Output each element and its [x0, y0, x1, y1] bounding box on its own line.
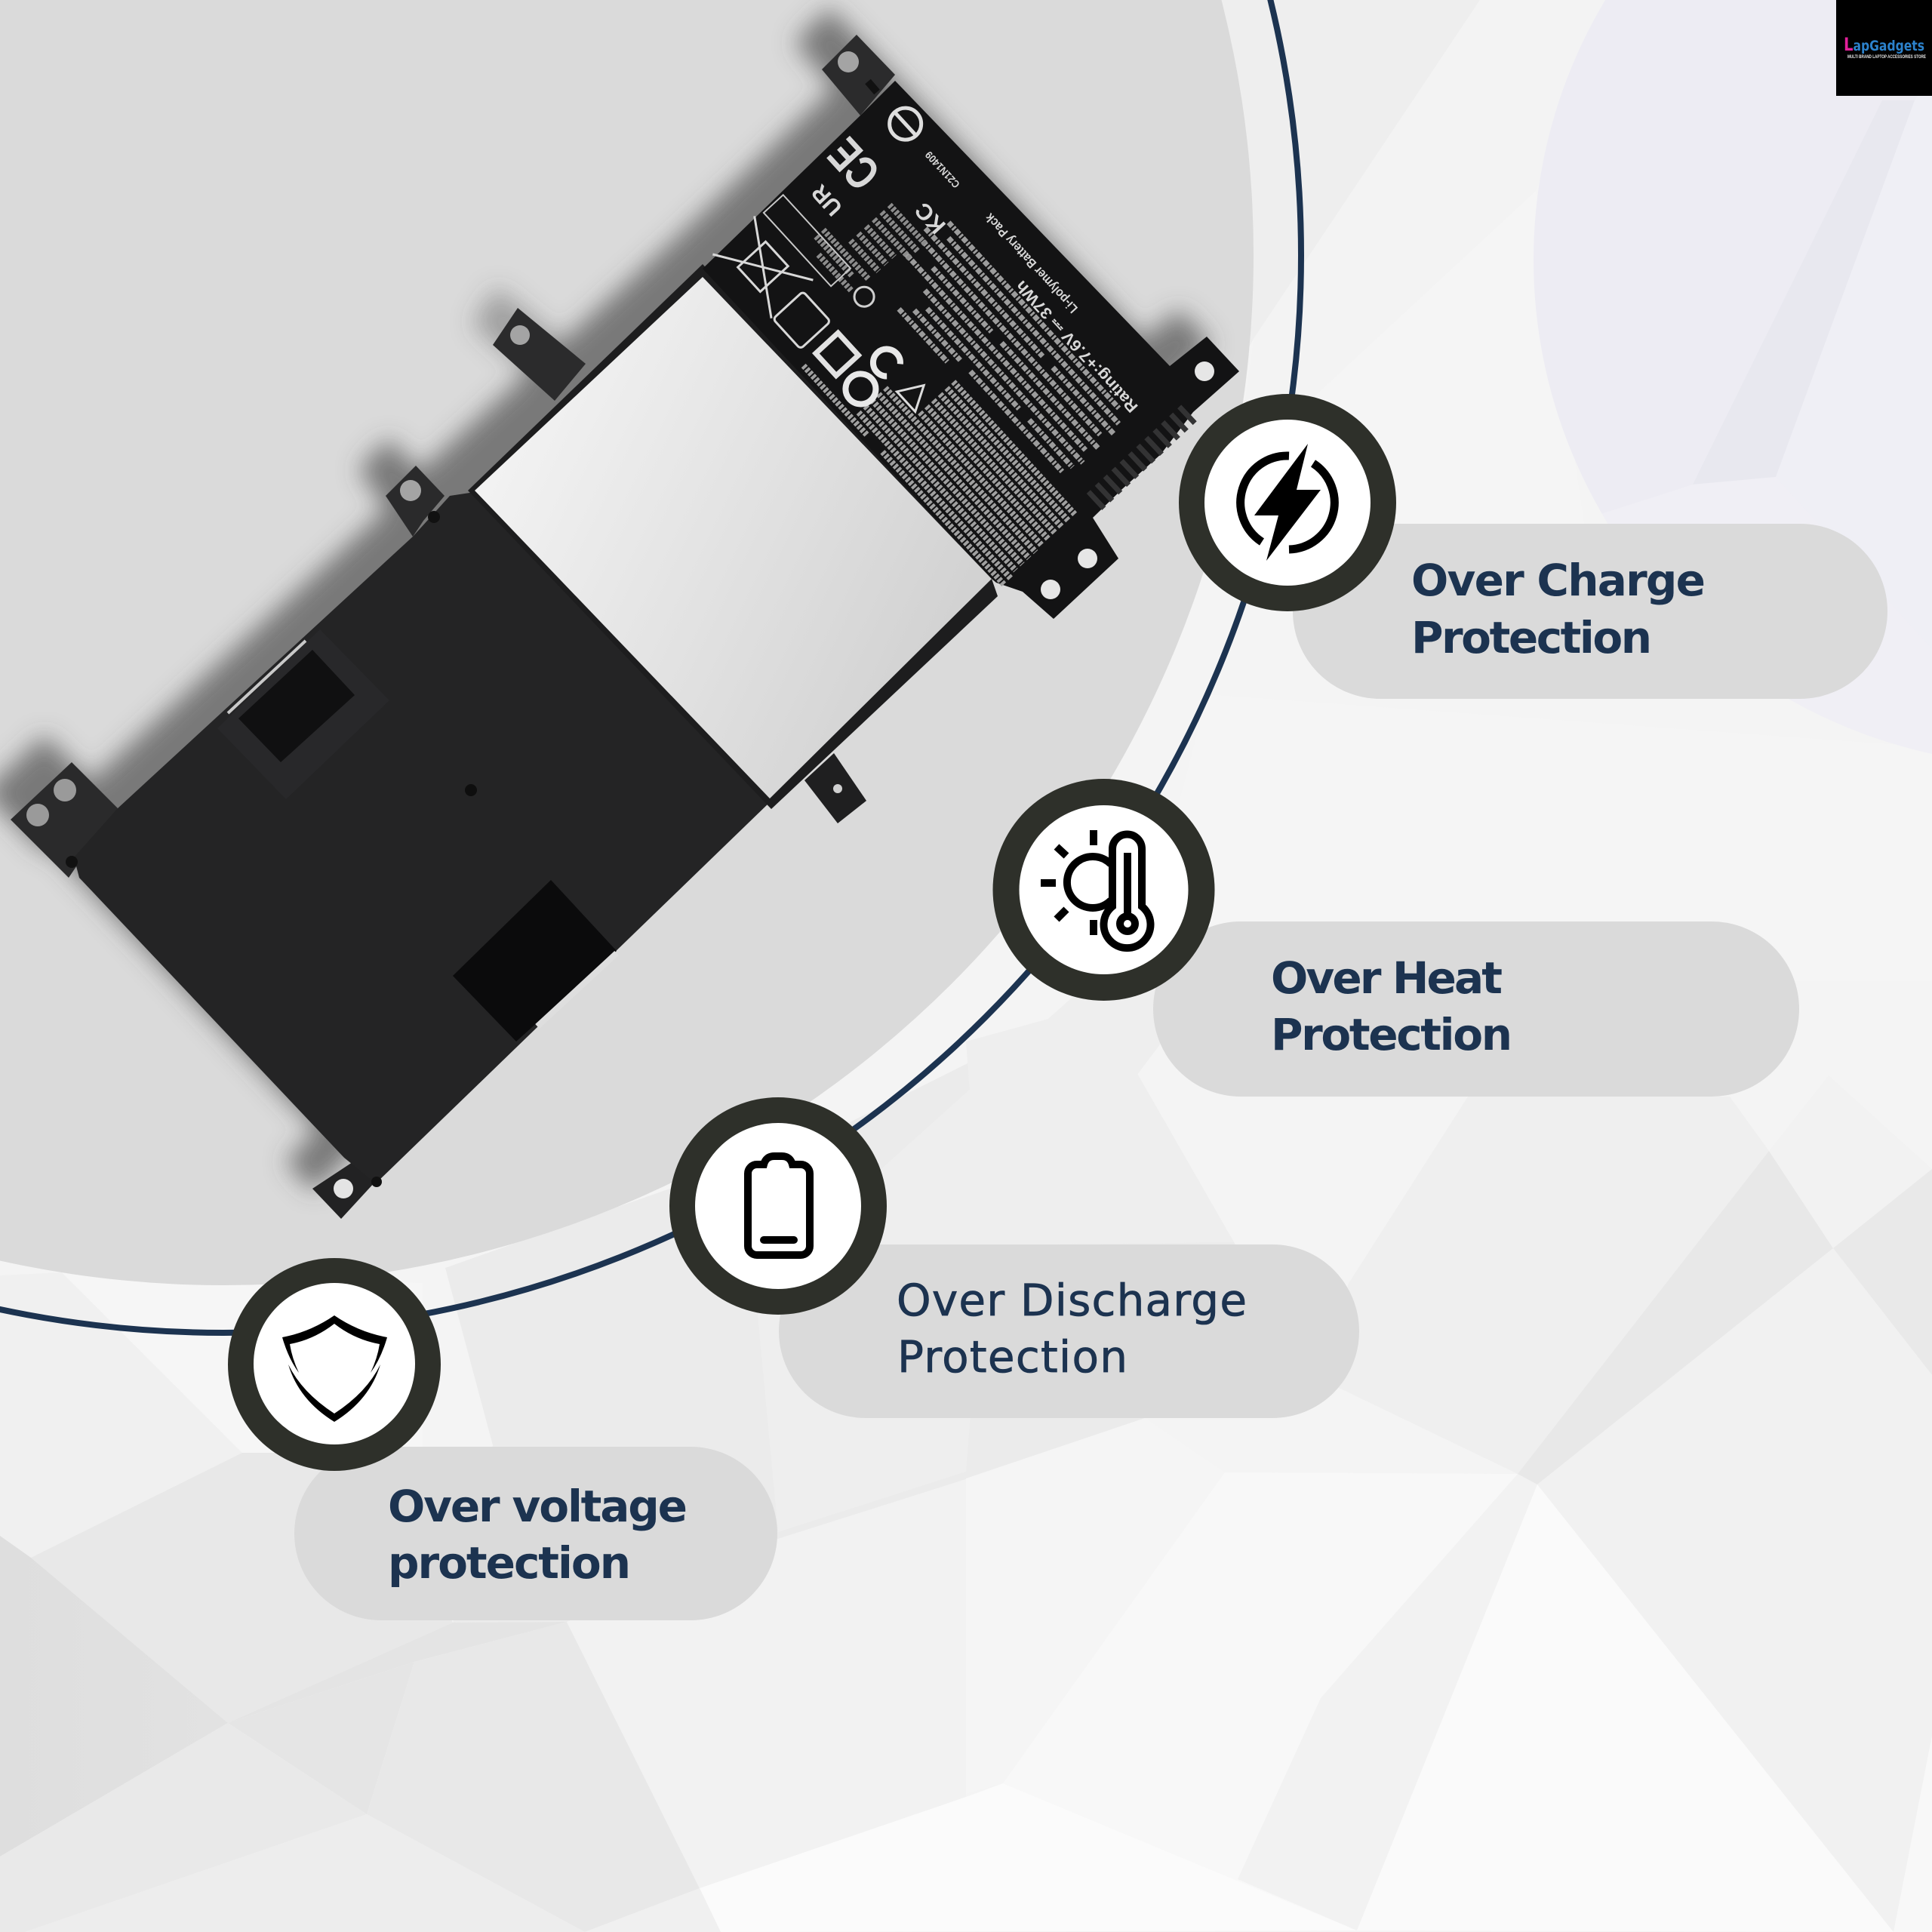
recycling square mark	[816, 333, 858, 376]
five in circle mark	[839, 368, 882, 411]
battery label print	[706, 88, 1192, 586]
pill: over heat	[1153, 921, 1799, 1097]
silver cell panel	[475, 277, 992, 798]
text: over heat protection	[1271, 952, 1512, 1060]
lower tape pad	[453, 880, 617, 1041]
dense fine print block	[804, 298, 1078, 586]
white disc	[1019, 805, 1188, 974]
UR mark: UR	[807, 180, 848, 220]
pill: over discharge	[779, 1244, 1359, 1418]
text: over heat protection: Protection	[1271, 1009, 1512, 1060]
bottom mounting tab	[312, 1161, 376, 1219]
text: over voltage protection: Over voltage	[388, 1481, 688, 1532]
ring	[228, 1258, 441, 1471]
text: over voltage protection	[388, 1481, 688, 1589]
logo background	[1836, 0, 1932, 96]
outlined box	[764, 195, 851, 286]
text: over discharge protection	[897, 1275, 1247, 1383]
lavender background blob	[1534, 100, 1915, 485]
tab holes and screws	[26, 51, 877, 1198]
badge: over charge	[1179, 394, 1396, 611]
text: over heat protection: Over Heat	[1271, 952, 1503, 1004]
battery product illustration	[0, 8, 1239, 1219]
text: over charge protection: Protection	[1411, 612, 1652, 663]
certification circle mark	[883, 101, 928, 146]
icon: lightning bolt in power ring	[1241, 444, 1334, 561]
crossed out bin	[712, 216, 813, 318]
icon: sun and thermometer	[1041, 830, 1150, 948]
middle tab	[493, 308, 586, 401]
fine print small block	[808, 186, 925, 302]
rim tab	[804, 753, 866, 823]
white disc	[1204, 420, 1371, 586]
badge: over voltage	[228, 1258, 441, 1471]
brand logo	[1836, 0, 1932, 96]
badge: over heat	[993, 779, 1215, 1001]
warning triangle	[897, 375, 933, 411]
text: over discharge protection: Protection	[897, 1331, 1128, 1383]
chemistry text: Li-polymer Battery Pack	[982, 211, 1081, 316]
C shaped mark	[868, 343, 903, 380]
recycle box	[773, 291, 830, 349]
text: over voltage protection: protection	[388, 1537, 631, 1589]
upper tape pad	[217, 629, 389, 799]
regulatory fine print lines	[871, 214, 1130, 485]
KC mark: KC	[910, 197, 951, 238]
pill: over charge	[1293, 524, 1887, 699]
small target circle	[851, 283, 878, 311]
navy connecting arc	[0, 0, 1301, 1333]
text: over charge protection: Over Charge	[1411, 555, 1706, 606]
text: over discharge protection: Over Discharge	[897, 1275, 1247, 1326]
ring	[669, 1097, 887, 1315]
icon: low battery	[748, 1156, 810, 1255]
ring	[993, 779, 1215, 1001]
icon: shield	[282, 1315, 387, 1422]
upper tab small	[386, 466, 445, 537]
battery drop shadow	[0, 8, 1212, 1192]
black cell body	[74, 492, 771, 1183]
text: over charge protection	[1411, 555, 1706, 663]
white disc	[695, 1123, 861, 1289]
CE mark: CE	[818, 128, 891, 199]
silver cell panel rim	[468, 264, 998, 809]
rating text: Rating:+7.6V ⎓ 37Wh	[1013, 277, 1142, 416]
model text: C21N1409	[922, 149, 962, 191]
ring	[1179, 394, 1396, 611]
badge: over discharge	[669, 1097, 887, 1315]
pill: over voltage	[294, 1447, 777, 1620]
grey backdrop circle	[0, 0, 1254, 1285]
mounting holes right	[1041, 361, 1214, 599]
left mounting tab	[11, 762, 118, 878]
connector ridges	[1094, 411, 1191, 502]
white disc	[254, 1283, 415, 1444]
label and connector	[703, 81, 1239, 619]
top mounting tab	[822, 35, 895, 115]
